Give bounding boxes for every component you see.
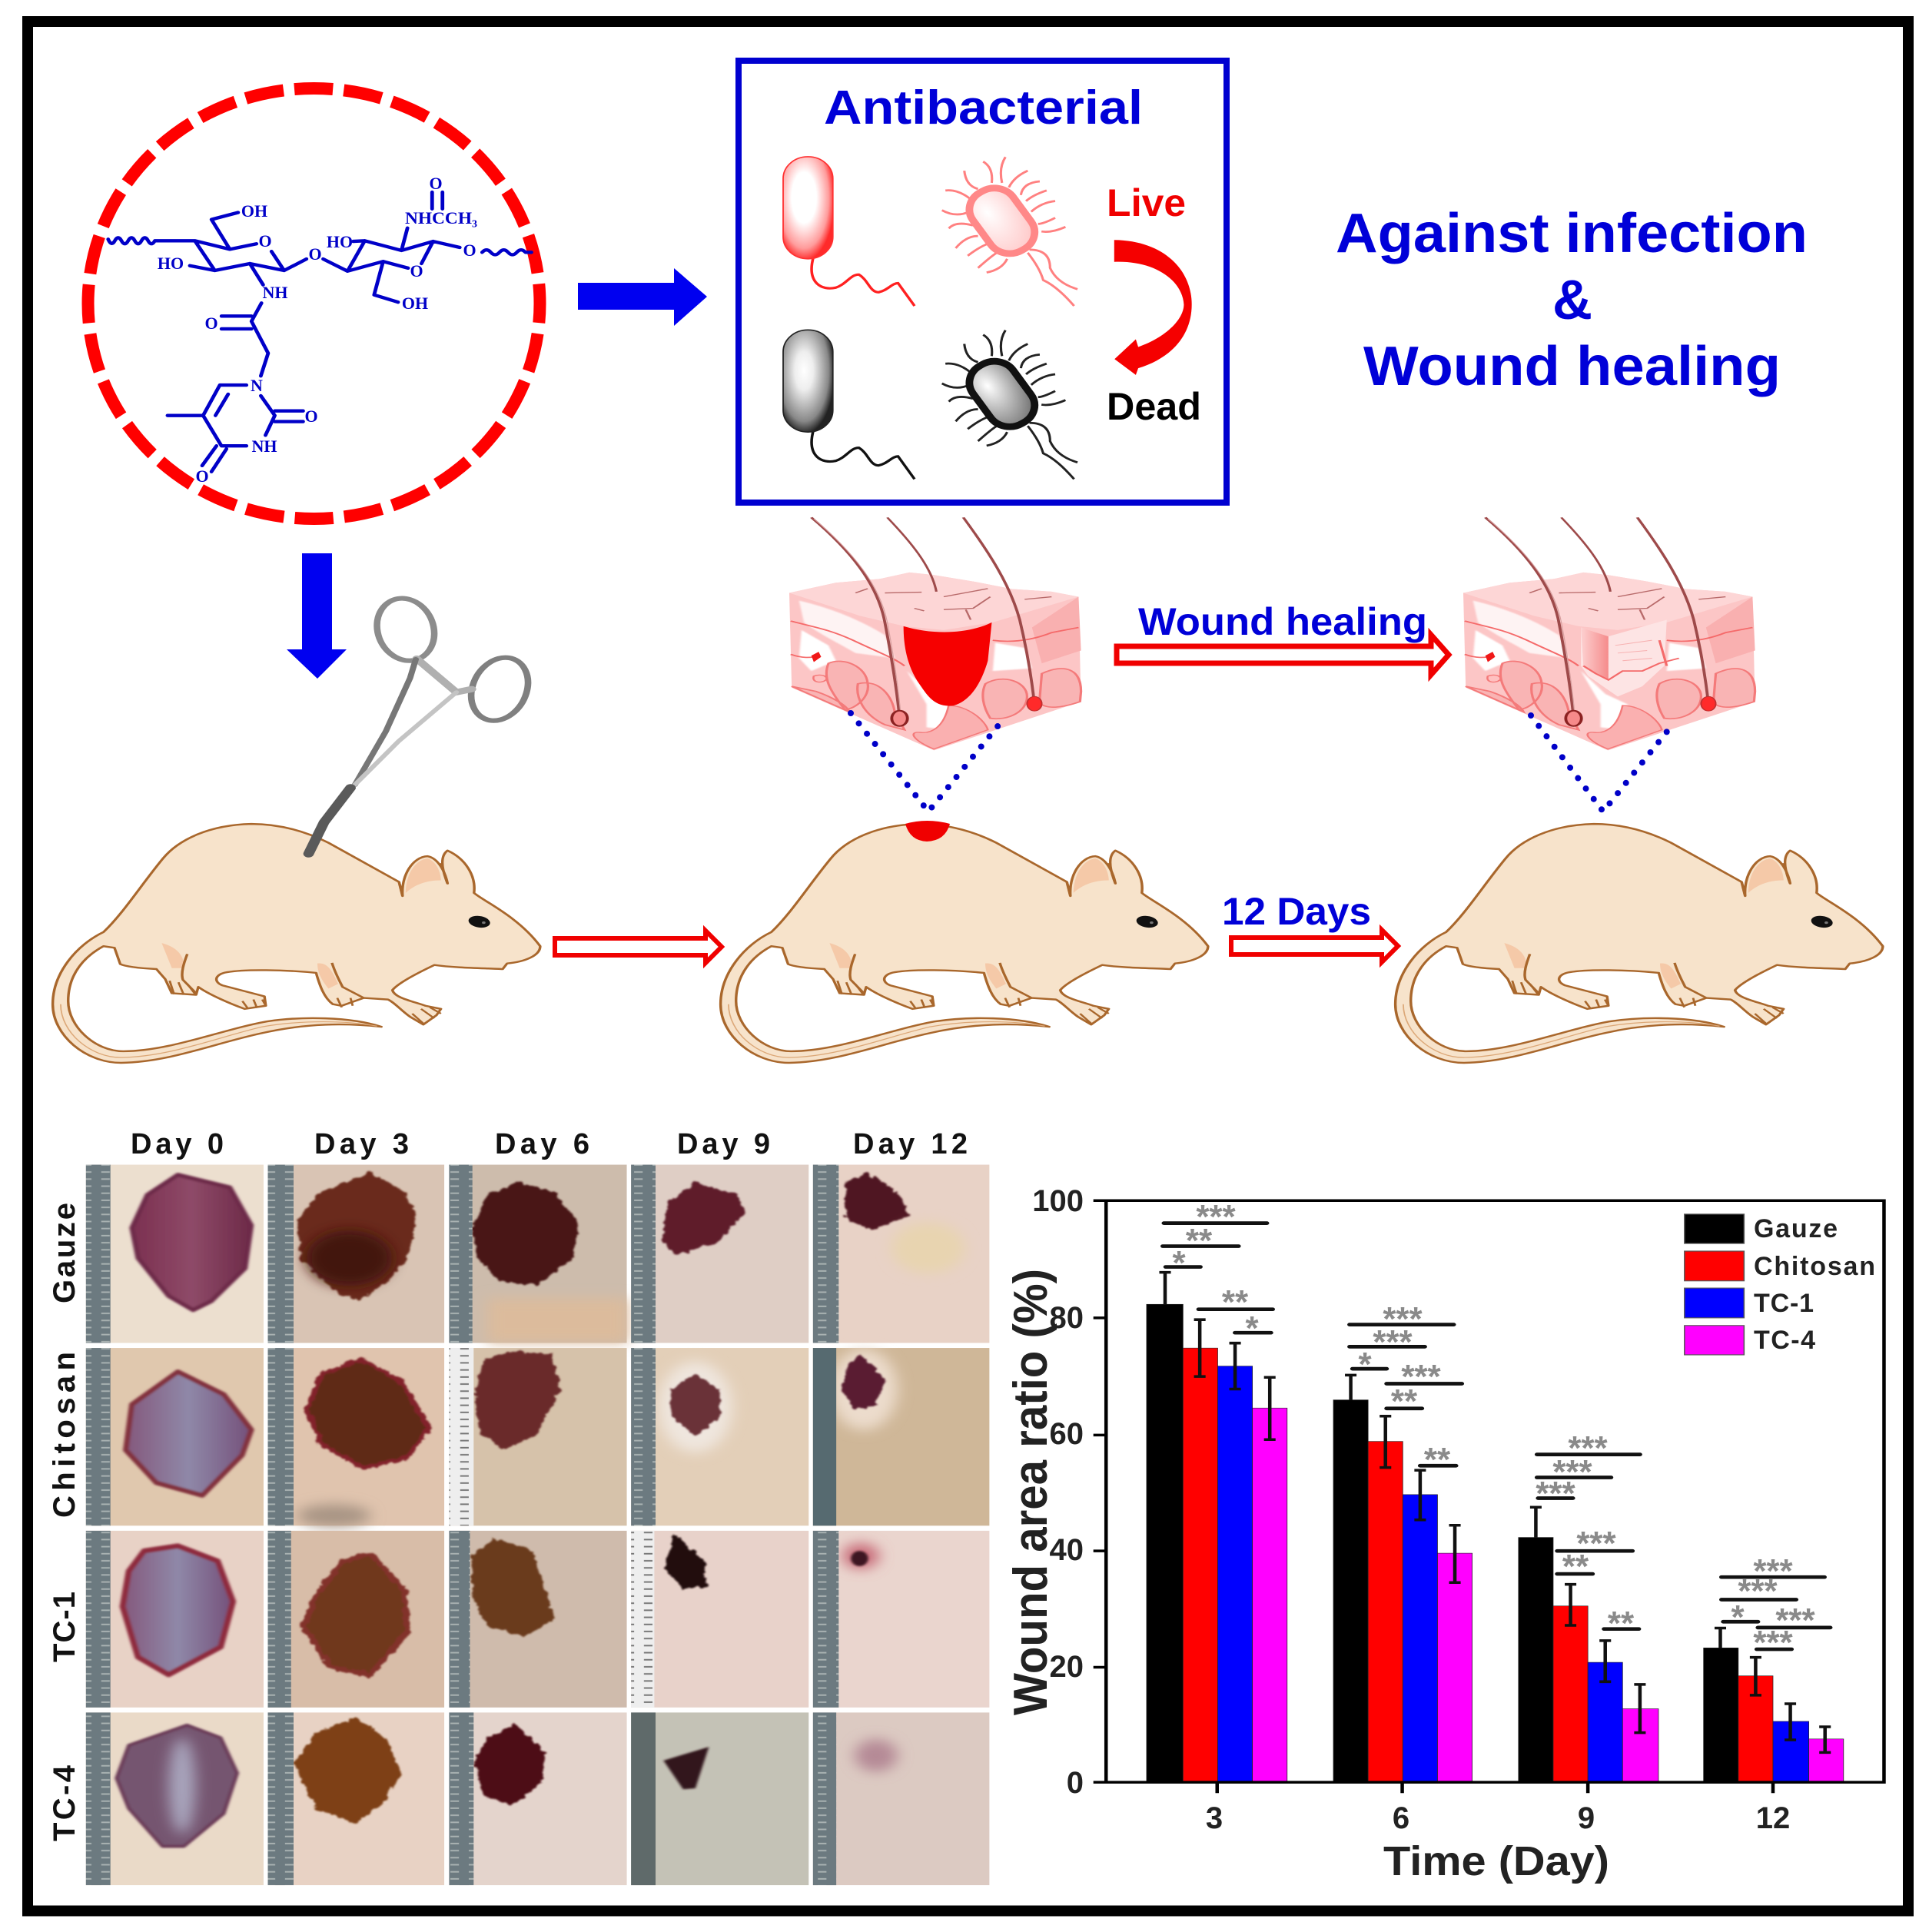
photo: Chitosan day 9 <box>631 1348 808 1525</box>
wound photo grid <box>86 1165 989 1885</box>
rat: wounded <box>721 821 1208 1063</box>
arrow: 12 days <box>1231 930 1398 962</box>
atom labels: N <box>251 376 263 395</box>
legend labels: Chitosan <box>1754 1252 1875 1281</box>
group row labels: TC-1 <box>48 1592 81 1662</box>
photo: Gauze day 0 <box>86 1165 264 1343</box>
legend labels: Gauze <box>1754 1214 1838 1243</box>
significance stars: ** <box>1391 1383 1418 1420</box>
y axis tick labels: 80 <box>1050 1301 1084 1335</box>
photo: Gauze day 6 <box>449 1165 628 1343</box>
y axis tick labels: 0 <box>1067 1766 1084 1800</box>
atom labels: O <box>304 407 318 426</box>
label: Live: Live <box>1107 181 1186 224</box>
bar chart: wound area ratio <box>1004 1184 1884 1884</box>
heading: against infection and wound healing: & <box>1552 270 1592 331</box>
significance stars: *** <box>1576 1525 1617 1562</box>
significance stars: *** <box>1383 1300 1423 1338</box>
icon: dead fimbriated bacterium <box>942 330 1077 479</box>
error bars <box>1159 1273 1831 1752</box>
significance stars: *** <box>1738 1572 1778 1610</box>
group row labels: Chitosan <box>48 1352 81 1518</box>
significance stars: * <box>1731 1598 1745 1636</box>
significance stars: ** <box>1562 1548 1589 1585</box>
atom labels: O <box>463 241 476 260</box>
dotted zoom lines: wounded <box>851 713 998 812</box>
heading: against infection and wound healing <box>1336 203 1808 397</box>
day column headings: Day 3 <box>314 1128 409 1160</box>
significance stars: *** <box>1373 1323 1413 1361</box>
legend labels <box>1754 1214 1875 1355</box>
day column headings: Day 6 <box>495 1128 589 1160</box>
significance stars: ** <box>1608 1605 1635 1642</box>
y axis tick labels: 60 <box>1050 1417 1084 1451</box>
significance stars: *** <box>1753 1552 1794 1590</box>
chemical bonds <box>108 192 532 472</box>
icon: dead rod bacterium <box>783 330 915 479</box>
atom labels: OH <box>402 294 428 313</box>
bars: day 9 <box>1519 1538 1658 1782</box>
significance stars: *** <box>1401 1358 1442 1396</box>
dotted zoom lines: healed <box>1531 715 1670 812</box>
y axis tick labels: 20 <box>1050 1650 1084 1684</box>
day column headings: Day 12 <box>853 1128 968 1160</box>
photo: TC-4 day 0 <box>86 1712 264 1885</box>
label: Dead: Dead <box>1107 385 1201 428</box>
icon: live fimbriated bacterium <box>942 157 1077 306</box>
significance stars: *** <box>1552 1453 1593 1491</box>
arrow: live to dead <box>1114 240 1192 375</box>
panel: antibacterial box <box>739 61 1227 503</box>
significance stars: ** <box>1222 1283 1249 1321</box>
group row labels: Gauze <box>48 1203 81 1303</box>
y axis tick labels <box>1032 1184 1084 1800</box>
legend labels: TC-1 <box>1754 1289 1814 1318</box>
skin block: wounded <box>789 517 1081 750</box>
significance stars: ** <box>1424 1441 1451 1479</box>
photo: TC-1 day 0 <box>86 1531 264 1708</box>
atom labels: O <box>258 231 272 251</box>
healed wound tissue <box>1581 620 1667 696</box>
x axis title: Time (Day) <box>1383 1838 1609 1884</box>
atom labels: O <box>308 244 322 264</box>
significance stars: *** <box>1536 1475 1576 1512</box>
atom labels: NH <box>252 437 277 456</box>
wound cavity <box>904 622 991 705</box>
significance stars: *** <box>1568 1429 1609 1467</box>
legend labels: TC-4 <box>1754 1326 1815 1355</box>
atom labels: NH <box>263 283 287 302</box>
heading: against infection and wound healing: Wound healing <box>1363 336 1781 397</box>
axes frame and ticks <box>1094 1200 1884 1793</box>
rat: healed <box>1396 824 1883 1063</box>
significance lines <box>1163 1223 1830 1649</box>
atom labels: O <box>195 466 209 486</box>
significance stars: * <box>1245 1310 1259 1347</box>
bacteria illustrations <box>783 157 1192 479</box>
atom labels: HO <box>158 254 184 273</box>
group row labels: TC-4 <box>48 1764 81 1841</box>
heading: against infection and wound healing: Against infection <box>1336 203 1808 264</box>
photo: Chitosan day 0 <box>86 1348 264 1525</box>
arrow: to wounded rat <box>555 931 722 963</box>
icon: hemostat forceps <box>309 596 536 854</box>
photo: Gauze day 12 <box>813 1165 989 1343</box>
bars: day 6 <box>1333 1400 1472 1782</box>
molecule in red dashed circle <box>88 88 540 519</box>
photo: Gauze day 9 <box>631 1165 808 1343</box>
x axis tick labels <box>1206 1801 1790 1835</box>
y axis tick labels: 100 <box>1032 1184 1084 1218</box>
x axis tick labels: 3 <box>1206 1801 1223 1835</box>
significance stars: * <box>1172 1244 1186 1282</box>
photo: TC-4 day 9 <box>631 1712 808 1885</box>
photo: Chitosan day 6 <box>449 1348 627 1525</box>
significance stars: *** <box>1196 1198 1237 1236</box>
photo: Chitosan day 12 <box>813 1348 989 1525</box>
photo: TC-4 day 3 <box>268 1712 444 1885</box>
arrow: wound healing <box>1117 635 1449 675</box>
bars: day 3 <box>1147 1304 1287 1782</box>
day column headings: Day 9 <box>677 1128 770 1160</box>
photo: TC-4 day 6 <box>449 1712 627 1885</box>
significance stars: ** <box>1186 1222 1213 1260</box>
x axis tick labels: 9 <box>1578 1801 1595 1835</box>
rat: untreated <box>53 824 540 1063</box>
icon: live rod bacterium <box>783 157 915 306</box>
wound on rat <box>905 821 950 842</box>
legend swatches <box>1685 1214 1744 1355</box>
heading: Antibacterial: Antibacterial <box>824 81 1143 134</box>
arrow: blue right <box>578 268 707 326</box>
atom labels <box>158 174 477 486</box>
photo: TC-1 day 12 <box>813 1531 989 1708</box>
atom labels: O <box>429 174 443 193</box>
label: Wound healing: Wound healing <box>1138 600 1427 643</box>
photo: Gauze day 3 <box>268 1165 444 1343</box>
atom labels: O <box>410 261 423 281</box>
significance stars: *** <box>1775 1602 1816 1639</box>
photo: TC-1 day 3 <box>268 1531 444 1708</box>
group row labels <box>48 1203 81 1841</box>
x axis tick labels: 6 <box>1393 1801 1409 1835</box>
atom labels: HO <box>327 232 353 251</box>
photo: TC-1 day 6 <box>449 1531 627 1708</box>
bars: day 12 <box>1704 1648 1844 1782</box>
y axis title: Wound area ratio (%) <box>1004 1269 1057 1715</box>
photo: Chitosan day 3 <box>268 1348 444 1527</box>
x axis tick labels: 12 <box>1756 1801 1790 1835</box>
photo: TC-1 day 9 <box>631 1531 808 1708</box>
y axis tick labels: 40 <box>1050 1533 1084 1567</box>
photo: TC-4 day 12 <box>813 1712 989 1885</box>
atom labels: NHCCH₃ <box>405 208 477 227</box>
significance stars <box>1172 1198 1816 1661</box>
arrow: blue down <box>287 553 347 679</box>
label: 12 Days: 12 Days <box>1222 890 1371 933</box>
significance stars: *** <box>1753 1624 1794 1661</box>
day column headings: Day 0 <box>131 1128 224 1160</box>
day column headings <box>131 1128 968 1160</box>
skin block: healed <box>1463 517 1755 750</box>
atom labels: OH <box>241 201 267 221</box>
atom labels: O <box>204 314 218 333</box>
significance stars: * <box>1358 1346 1372 1383</box>
